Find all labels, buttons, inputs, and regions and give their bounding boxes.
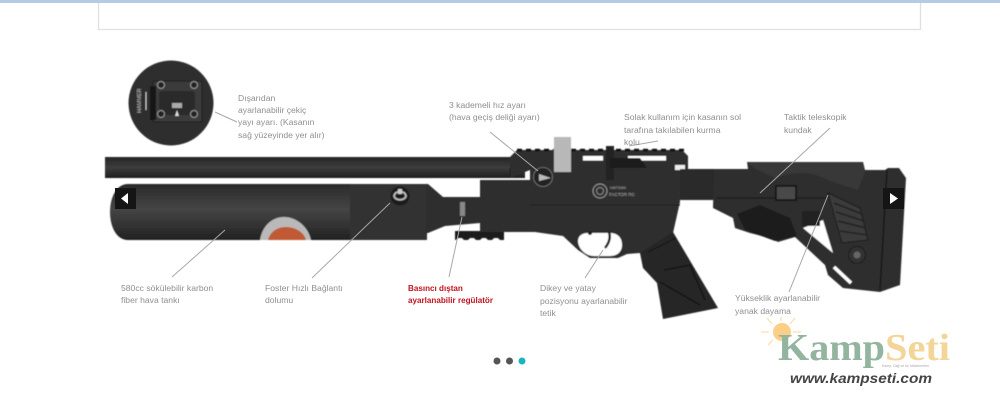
stock slot (834, 267, 851, 283)
receiver: HATSAN (610, 185, 626, 190)
speed dial (534, 168, 552, 186)
logo: KampSeti: www.kampseti.com (790, 370, 932, 386)
air tank (110, 184, 480, 240)
inset circle: hammer spring: HAMMER (137, 89, 143, 113)
logo: KampSeti: Kamp, Dağ ve Av Malzemeleri (882, 364, 929, 368)
label: tank: fiber hava tankı (121, 295, 180, 305)
icon: sun (761, 317, 801, 345)
trigger guard opening (578, 233, 622, 256)
label: cheek rest: Yükseklik ayarlanabilir (735, 293, 820, 303)
label: left-hand lever: Solak kullanım için kasanın sol (624, 112, 741, 122)
top rail teeth (517, 149, 684, 151)
receiver (480, 137, 688, 258)
label: trigger: pozisyonu ayarlanabilir (540, 296, 628, 306)
label: foster: Foster Hızlı Bağlantı (265, 283, 343, 293)
label: hammer spring: yayı ayarı. (Kasanın (238, 117, 315, 127)
label: trigger: Dikey ve yatay (540, 283, 597, 293)
top blue bar (0, 0, 1000, 3)
telescopic stock (713, 162, 906, 292)
receiver logo (593, 184, 607, 198)
label: regulator: Basıncı dıştan (408, 284, 463, 293)
slider dots (494, 358, 526, 364)
inset circle: hammer spring (128, 60, 214, 146)
label: left-hand lever: kolu (624, 137, 640, 147)
label: stock: Taktik teleskopik (784, 112, 847, 122)
label: cheek rest: yanak dayama (735, 306, 791, 316)
logo: KampSeti: Kamp (778, 327, 885, 369)
label: left-hand lever: tarafına takılabilen kurma (624, 125, 721, 135)
label: foster: dolumu (265, 295, 293, 305)
label: tank: 580cc sökülebilir karbon (121, 283, 213, 293)
label: hammer spring: Dışarıdan (238, 93, 275, 103)
accessory rail (455, 231, 504, 240)
text labels (121, 93, 847, 318)
barrel (105, 157, 525, 178)
top empty panel (98, 3, 920, 30)
strut window (803, 220, 833, 253)
buffer tube (680, 169, 716, 200)
label: regulator: ayarlanabilir regülatör (408, 296, 494, 305)
cheek lever (776, 186, 796, 200)
bolt (606, 146, 614, 180)
tank emblem (260, 217, 311, 240)
lower lever (737, 205, 797, 241)
foster fitting (390, 186, 410, 206)
logo: KampSeti: Seti (885, 327, 950, 369)
slider prev button (115, 188, 136, 209)
pistol grip (640, 232, 718, 319)
cheek rest (747, 162, 865, 190)
label: stock: kundak (784, 125, 812, 135)
rifle (105, 137, 906, 319)
ribbed panel (828, 193, 868, 243)
slider next button (883, 188, 904, 209)
adjuster knob (848, 246, 866, 264)
pointer lines (172, 112, 830, 292)
loading gate (554, 137, 571, 172)
label: hammer spring: sağ yüzeyinde yer alır) (238, 130, 325, 140)
label: speed: 3 kademeli hız ayarı (449, 100, 526, 110)
label: trigger: tetik (540, 308, 556, 318)
logo: KampSeti (761, 317, 950, 386)
receiver: FACTOR RC (609, 192, 636, 197)
label: hammer spring: ayarlanabilir çekiç (238, 105, 307, 115)
label: speed: (hava geçiş deliği ayarı) (449, 112, 540, 122)
